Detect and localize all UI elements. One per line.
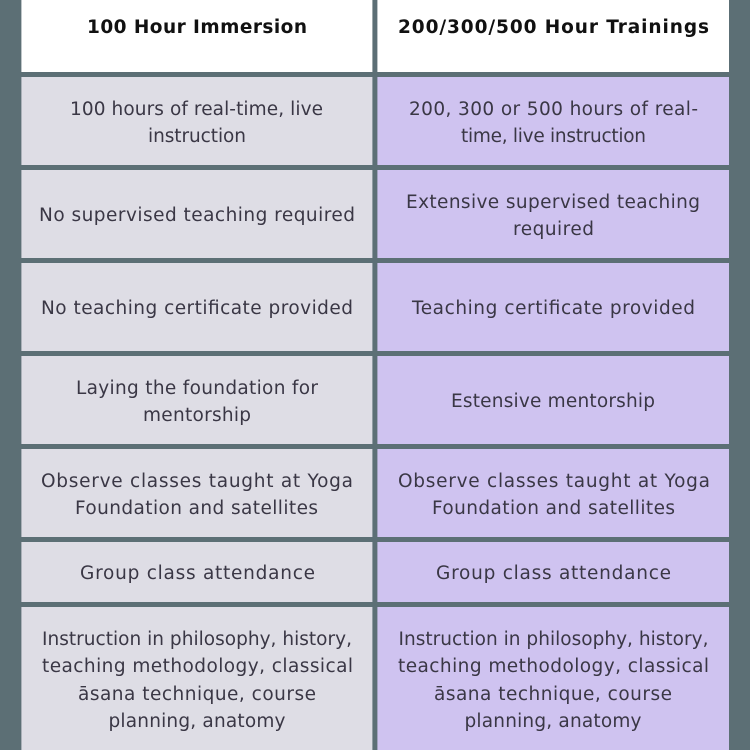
row 2 left text: No supervised teaching required	[39, 205, 355, 226]
row 4 right cell	[377, 356, 729, 444]
row 2 left cell	[21, 170, 372, 258]
row 6 right cell	[377, 542, 729, 602]
row 6 left cell	[21, 542, 372, 602]
row 1 right text: time, live instruction	[461, 126, 646, 147]
row 6 right text: Group class attendance	[436, 563, 671, 584]
row 1 right text: 200, 300 or 500 hours of real-	[409, 99, 698, 120]
row 7 left text: Instruction in philosophy, history,	[42, 629, 352, 650]
row 4 left text: mentorship	[143, 405, 251, 426]
row 2 right text	[406, 192, 700, 240]
row 7 right text: āsana technique, course	[434, 684, 672, 705]
row 3 left cell	[21, 263, 372, 351]
row 5 left text: Observe classes taught at Yoga	[41, 471, 353, 492]
row 6 left text: Group class attendance	[80, 563, 315, 584]
row 5 left cell	[21, 449, 372, 537]
row 5 left text	[41, 471, 353, 519]
row 5 right text	[398, 471, 710, 519]
row 3 right cell	[377, 263, 729, 351]
row 2 right text: required	[513, 219, 594, 240]
row 7 left text	[42, 629, 353, 732]
row 5 left text: Foundation and satellites	[75, 498, 318, 519]
row 7 right text	[398, 629, 709, 732]
row 5 right text: Foundation and satellites	[432, 498, 675, 519]
row 5 right text: Observe classes taught at Yoga	[398, 471, 710, 492]
row 1 right text	[409, 99, 698, 147]
row 7 right text: Instruction in philosophy, history,	[398, 629, 708, 650]
row 7 left text: planning, anatomy	[108, 711, 286, 732]
row 7 right text: teaching methodology, classical	[398, 656, 709, 677]
heading: 100 hour immersion: 100 Hour Immersion	[87, 17, 307, 38]
row 1 left text	[70, 99, 323, 147]
row 1 left text: instruction	[148, 126, 246, 147]
row 4 left text	[76, 378, 318, 426]
header cell: trainings	[377, 0, 729, 72]
row 4 left cell	[21, 356, 372, 444]
row 1 left text: 100 hours of real-time, live	[70, 99, 323, 120]
row 1 right cell	[377, 77, 729, 165]
row 1 left cell	[21, 77, 372, 165]
row 7 right text: planning, anatomy	[464, 711, 642, 732]
heading: trainings: 200/300/500 Hour Trainings	[398, 17, 709, 38]
row 7 left cell	[21, 607, 372, 750]
row 3 left text: No teaching certificate provided	[41, 298, 353, 319]
header cell: 100 hour immersion	[21, 0, 372, 72]
row 7 left text: āsana technique, course	[78, 684, 316, 705]
row 4 right text: Estensive mentorship	[451, 391, 655, 412]
row 3 right text: Teaching certificate provided	[411, 298, 695, 319]
row 4 left text: Laying the foundation for	[76, 378, 318, 399]
row 7 right cell	[377, 607, 729, 750]
row 7 left text: teaching methodology, classical	[42, 656, 353, 677]
row 5 right cell	[377, 449, 729, 537]
row 2 right cell	[377, 170, 729, 258]
row 2 right text: Extensive supervised teaching	[406, 192, 700, 213]
